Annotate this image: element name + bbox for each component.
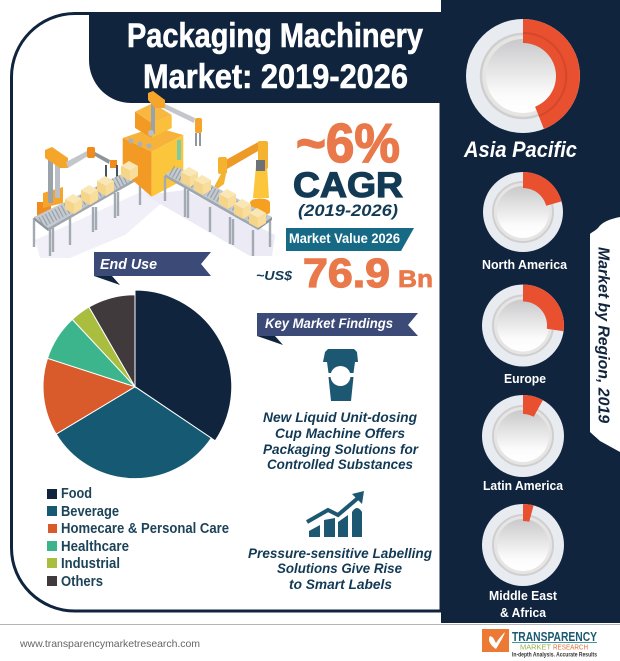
- donut: Middle East and Africa: [482, 504, 564, 586]
- logo: Transparency Market Research: RESEARCH: [553, 642, 588, 652]
- market value figure: 76.9: [303, 250, 390, 296]
- CAGR period: (2019-2026): [298, 201, 398, 220]
- logo: Transparency Market Research: TRANSPARENCY: [512, 629, 597, 644]
- CAGR callout: [293, 112, 403, 220]
- sidebar panel: market by region: [441, 0, 620, 623]
- left robot arm: [37, 147, 117, 216]
- side tab: market by region heading: [590, 217, 620, 452]
- end use ribbon heading: [94, 252, 211, 285]
- donut: Latin America: [482, 395, 564, 477]
- icon: coffee cup: [323, 349, 358, 401]
- logo: Transparency Market Research: MARKET: [520, 642, 551, 652]
- finding: liquid unit-dosing cup machine: New Liquid Unit-dosing: [263, 409, 417, 425]
- label: Latin America: Latin America: [483, 478, 564, 493]
- side tab: market by region heading: Market by Region, 2019: [594, 247, 612, 423]
- CAGR label: CAGR: [293, 166, 403, 205]
- key market findings ribbon heading: [257, 313, 418, 345]
- right robot arm: [214, 141, 270, 215]
- market value banner: Market Value 2026: [289, 230, 400, 246]
- label: Europe: Europe: [504, 371, 546, 386]
- end use ribbon heading: End Use: [100, 256, 157, 273]
- market value figure: [256, 250, 433, 296]
- label: Asia Pacific: Asia Pacific: [463, 137, 577, 162]
- right conveyor: [165, 167, 272, 256]
- pie chart legend: Homecare & Personal Care: [61, 521, 229, 537]
- donut: North America: [483, 172, 563, 252]
- finding: pressure-sensitive labelling: [248, 545, 432, 592]
- label: Middle East and Africa: Middle East: [489, 588, 558, 603]
- title: Market: 2019-2026: [143, 58, 408, 96]
- finding: liquid unit-dosing cup machine: Controlled Substances: [267, 456, 413, 472]
- donut: Asia Pacific: [466, 19, 580, 133]
- label: North America: North America: [482, 257, 568, 272]
- icon: rising bar chart: [307, 491, 364, 537]
- market value banner: [286, 228, 414, 251]
- market value figure: ~US$: [256, 268, 293, 283]
- pie chart legend: Industrial: [61, 556, 120, 572]
- illustration: packaging production line: [34, 91, 275, 258]
- finding: liquid unit-dosing cup machine: Cup Machine Offers: [275, 425, 405, 441]
- main content panel: [12, 14, 441, 611]
- finding: pressure-sensitive labelling: Solutions Give Rise: [277, 560, 402, 576]
- growth rate: ~6%: [296, 112, 400, 174]
- finding: liquid unit-dosing cup machine: Packaging Solutions for: [263, 441, 419, 457]
- left conveyor: [34, 169, 143, 256]
- label: Middle East and Africa: [489, 588, 558, 620]
- finding: pressure-sensitive labelling: to Smart Labels: [289, 576, 392, 592]
- label: Middle East and Africa: & Africa: [500, 605, 547, 620]
- central machine: [123, 91, 202, 197]
- pie chart legend: Food: [61, 486, 92, 502]
- title: Packaging Machinery: [127, 17, 423, 55]
- key market findings ribbon heading: Key Market Findings: [265, 315, 393, 331]
- market value figure: Bn: [398, 266, 433, 293]
- logo: Transparency Market Research: In-depth Analysis. Accurate Results: [512, 652, 597, 658]
- footer: website: www.transparencymarketresearch.com: [19, 638, 200, 650]
- finding: liquid unit-dosing cup machine: [263, 409, 419, 472]
- finding: pressure-sensitive labelling: Pressure-sensitive Labelling: [248, 545, 432, 561]
- pie chart legend: Healthcare: [61, 539, 129, 555]
- title banner: [89, 12, 441, 103]
- pie chart legend: Beverage: [61, 504, 119, 520]
- pie chart legend: [47, 486, 229, 590]
- pie chart legend: Others: [61, 574, 103, 590]
- title: [127, 17, 423, 96]
- logo: Transparency Market Research: [482, 629, 597, 658]
- pie chart: end use: [43, 290, 232, 479]
- donut: Europe: [482, 284, 564, 366]
- product boxes: [65, 161, 266, 228]
